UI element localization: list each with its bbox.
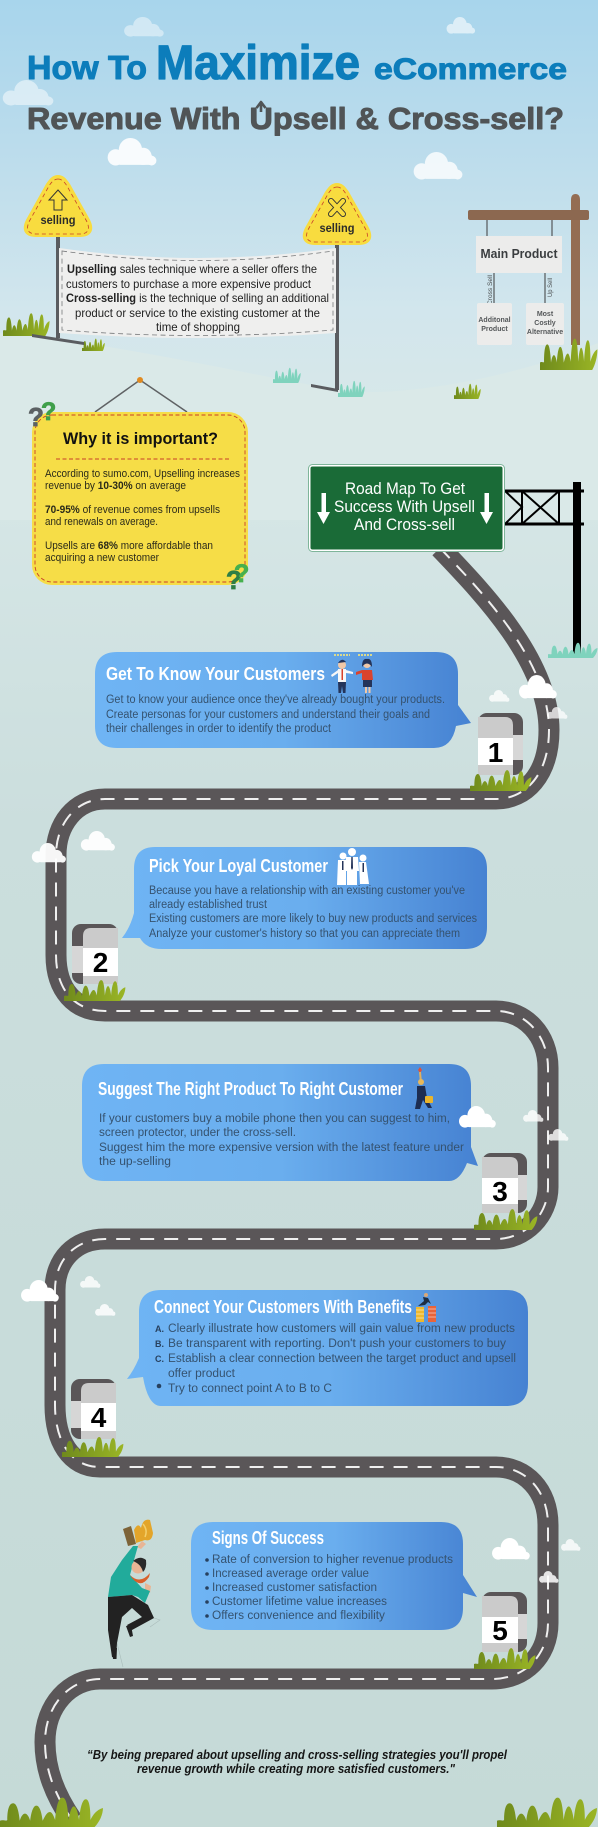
title: Maximize: [156, 37, 360, 90]
milestone 1: [470, 713, 531, 791]
step 1 bubble: [95, 652, 471, 748]
step 3 bubble: Suggest him the more expensive version with the latest feature under: [99, 1142, 464, 1154]
step 5 bubble: Rate of conversion to higher revenue products: [212, 1554, 453, 1566]
icon: question marks bottom right: [226, 560, 249, 595]
sign: upselling: [24, 175, 92, 237]
banner: definitions: Upselling sales technique where a seller offers the: [67, 262, 317, 276]
panel: why it is important: and renewals on average.: [45, 516, 158, 528]
step 2 bubble: [122, 847, 487, 949]
step 4 bubble: Establish a clear connection between the target product and upsell: [168, 1353, 516, 1365]
milestone 2: [64, 924, 125, 1001]
icon: two customers: [331, 655, 373, 693]
panel: why it is important: revenue by 10-30% on average: [45, 480, 186, 492]
hanging signpost: product diagram: Most: [537, 311, 554, 318]
step 2 bubble: Existing customers are more likely to buy new products and services: [149, 913, 477, 925]
sign: cross-selling: selling: [320, 221, 354, 235]
banner: definitions: time of shopping: [156, 320, 240, 334]
step 2 bubble: Because you have a relationship with an existing customer you've: [149, 885, 465, 897]
sign: upselling: selling: [40, 213, 76, 227]
hanging signpost: product diagram: Up Sell: [547, 278, 554, 297]
step 3 bubble: [82, 1064, 478, 1181]
icon: question marks top left: ?: [41, 398, 56, 426]
step 4 bubble: offer product: [168, 1368, 236, 1380]
step 4 bubble: [127, 1290, 528, 1406]
banner: definitions: product or service to the existing customer at the: [75, 306, 320, 320]
step 1 bubble: Get to know your audience once they've already bought your products.: [106, 694, 445, 706]
hanging signpost: product diagram: Costly: [534, 320, 556, 327]
title: Revenue With Upsell & Cross-sell?: [27, 101, 564, 136]
step 1 bubble: their challenges in order to identify the product: [106, 723, 332, 735]
icon: businessman with briefcase: [415, 1067, 433, 1109]
step 3 bubble: Suggest The Right Product To Right Customer: [98, 1079, 403, 1099]
panel: why it is important: According to sumo.com, Upselling increases: [45, 468, 240, 480]
milestone 1: 1: [488, 737, 503, 768]
step 2 bubble: Pick Your Loyal Customer: [149, 856, 328, 876]
closing quote: revenue growth while creating more satisfied customers.": [137, 1761, 456, 1776]
hanging signpost: product diagram: Main Product: [480, 246, 558, 261]
step 4 bubble: C.: [155, 1354, 164, 1364]
road gantry: [505, 482, 598, 658]
panel: why it is important: acquiring a new customer: [45, 552, 159, 564]
step 3 bubble: If your customers buy a mobile phone then you can suggest to him,: [99, 1113, 450, 1125]
milestone 3: [474, 1153, 537, 1230]
hanging signpost: product diagram: [468, 194, 597, 370]
step 2 bubble: Analyze your customer's history so that you can appreciate them: [149, 928, 460, 940]
milestone 5: 5: [492, 1615, 508, 1646]
step 4 bubble: B.: [155, 1339, 164, 1349]
hanging signpost: product diagram: Additonal: [478, 317, 511, 324]
step 5 bubble: [191, 1522, 477, 1630]
clouds along road: [21, 675, 580, 1583]
title: eCommerce: [374, 53, 567, 86]
icon: question marks top left: [28, 398, 56, 432]
road: [45, 548, 549, 1820]
hanging signpost: product diagram: Cross Sell: [487, 274, 494, 305]
step 5 bubble: Increased customer satisfaction: [212, 1582, 377, 1594]
icon: question marks bottom right: ?: [234, 560, 249, 588]
milestone 4: [62, 1379, 123, 1457]
step 3 bubble: screen protector, under the cross-sell.: [99, 1127, 296, 1139]
step 5 bubble: Signs Of Success: [212, 1528, 324, 1548]
poles of upsell and cross-sell signs: [32, 236, 339, 392]
closing quote: [87, 1747, 507, 1776]
icon: question marks top left: ?: [28, 402, 44, 432]
milestone 5: [474, 1592, 535, 1669]
step 5 bubble: Offers convenience and flexibility: [212, 1610, 385, 1622]
panel: why it is important: 70-95% of revenue comes from upsells: [45, 504, 220, 516]
step 1 bubble: Create personas for your customers and understand their goals and: [106, 709, 430, 721]
road map sign: Road Map To Get: [345, 480, 465, 498]
banner: definitions: customers to purchase a more expensive product: [66, 277, 312, 291]
icon: man jumping over coin stacks: [416, 1293, 436, 1322]
step 2 bubble: already established trust: [149, 899, 268, 911]
title: [27, 37, 567, 136]
panel: why it is important: Upsells are 68% more affordable than: [45, 540, 213, 552]
step 4 bubble: Be transparent with reporting. Don't push your customers to buy: [168, 1338, 506, 1350]
step 3 bubble: the up-selling: [99, 1156, 171, 1168]
banner: definitions: Cross-selling is the technique of selling an additional: [66, 291, 329, 305]
title: How To: [27, 49, 147, 86]
step 4 bubble: Try to connect point A to B to C: [168, 1383, 332, 1395]
icon: white customer silhouettes: [337, 848, 369, 885]
milestone 3: 3: [492, 1176, 508, 1207]
banner: definitions: [59, 248, 336, 338]
sign: cross-selling: [303, 183, 371, 245]
icon: man jumping with trophy: [108, 1520, 160, 1667]
icon: question marks bottom right: ?: [226, 565, 242, 595]
road map sign: Success With Upsell: [334, 498, 475, 516]
step 5 bubble: Increased average order value: [212, 1568, 369, 1580]
hanging signpost: product diagram: Alternative: [527, 329, 563, 336]
step 5 bubble: Customer lifetime value increases: [212, 1596, 387, 1608]
ground grass near banner: [3, 313, 481, 399]
hanging signpost: product diagram: Product: [481, 326, 508, 333]
milestone 4: 4: [91, 1402, 107, 1433]
panel: why it is important: Why it is important?: [63, 429, 218, 448]
bottom grass: [0, 1798, 597, 1827]
milestone 2: 2: [93, 947, 108, 978]
closing quote: “By being prepared about upselling and cross-selling strategies you'll propel: [87, 1747, 507, 1762]
clouds in sky: [3, 17, 475, 179]
road map sign: And Cross-sell: [354, 516, 455, 534]
step 4 bubble: Connect Your Customers With Benefits: [154, 1297, 412, 1317]
step 1 bubble: Get To Know Your Customers: [106, 664, 325, 684]
step 4 bubble: A.: [155, 1324, 164, 1334]
step 4 bubble: Clearly illustrate how customers will gain value from new products: [168, 1323, 515, 1335]
panel: why it is important: [32, 377, 248, 585]
road map sign: [308, 464, 504, 552]
